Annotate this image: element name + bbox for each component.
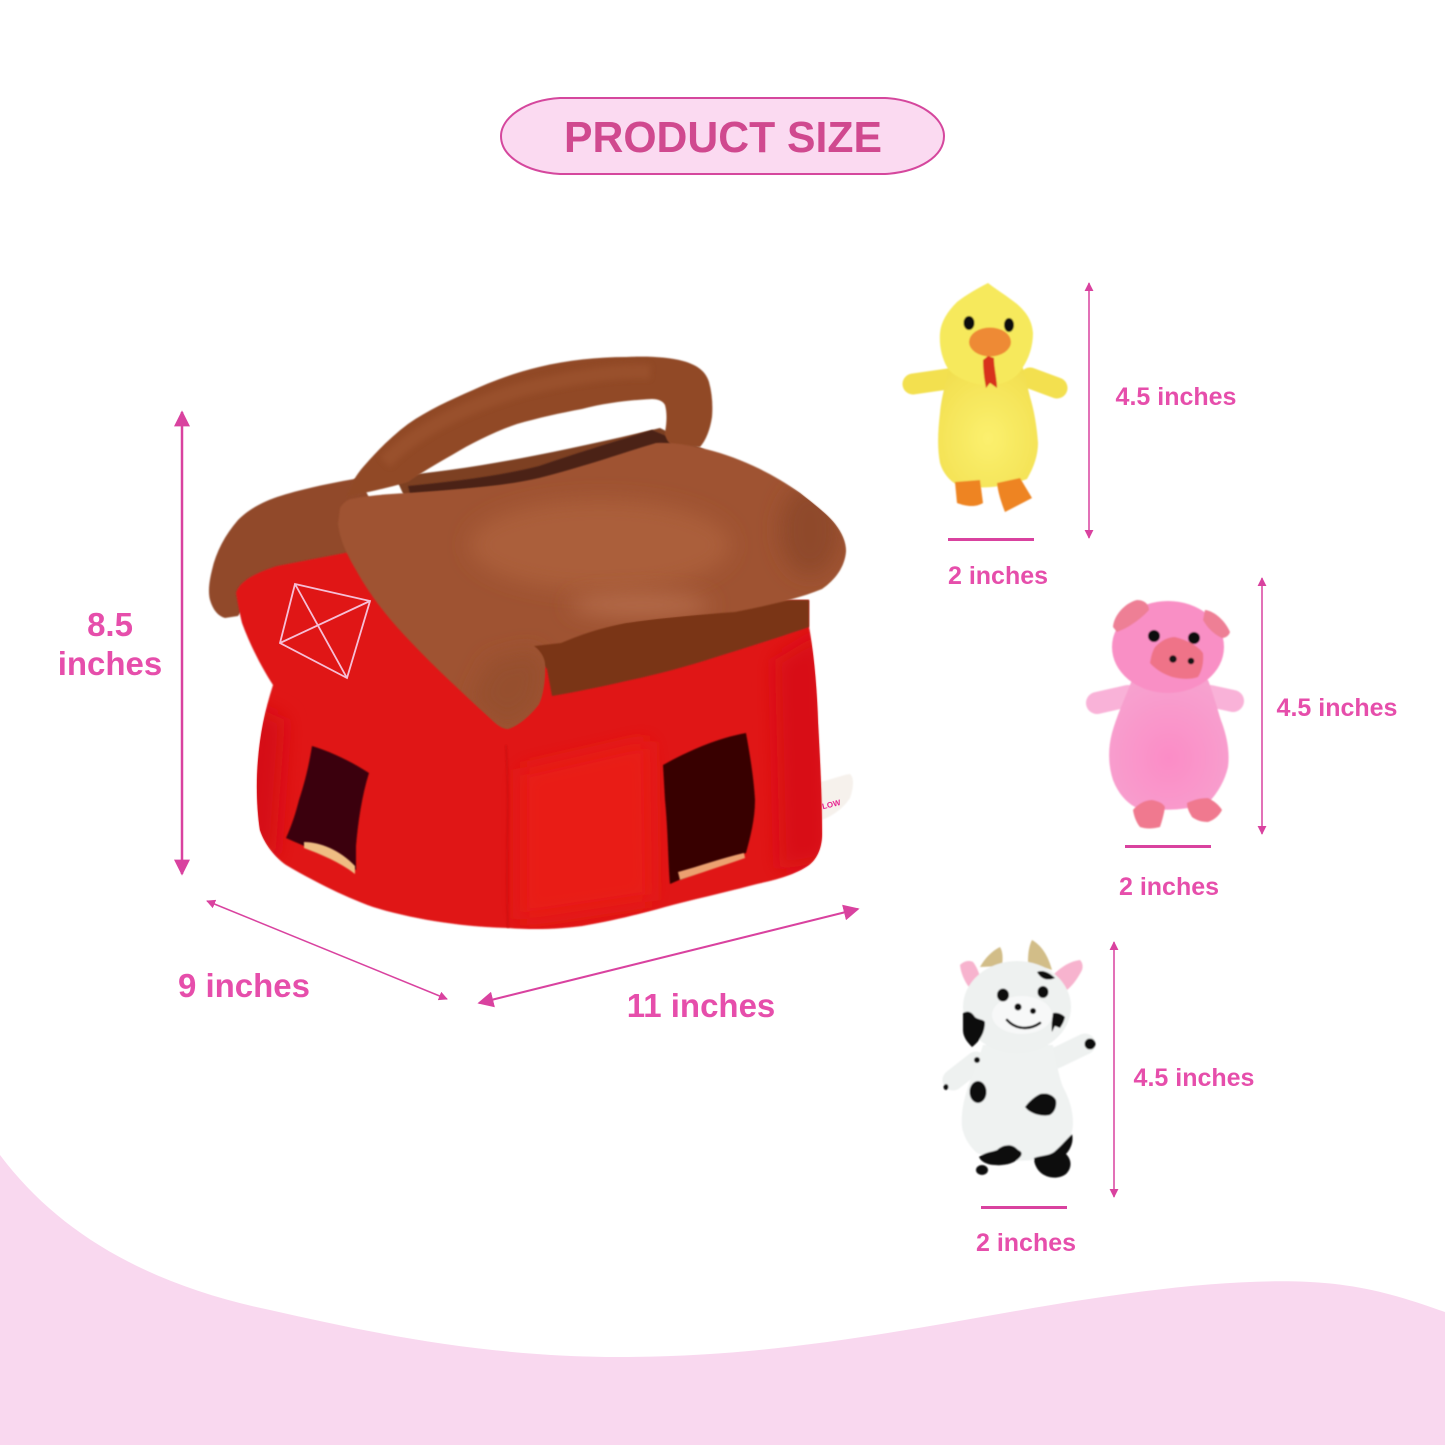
arrow: barn depth bbox=[207, 901, 447, 999]
pig: eyes bbox=[1148, 630, 1200, 644]
background wave bbox=[0, 1155, 1445, 1445]
roof: main blanket bbox=[338, 443, 846, 729]
arrow: barn height bbox=[181, 412, 183, 874]
barn: tag text: LOW bbox=[821, 798, 842, 811]
arrow: barn width bbox=[479, 909, 858, 1003]
chick: eyes bbox=[964, 316, 1014, 332]
label: pig height: 4.5 inches bbox=[1277, 694, 1397, 722]
chick: arms bbox=[913, 378, 1057, 388]
pig: arms bbox=[1097, 696, 1233, 703]
cow: smile bbox=[1007, 1020, 1040, 1028]
label: chick width: 2 inches bbox=[948, 562, 1048, 590]
barn: front seam bbox=[506, 745, 508, 928]
arrow: chick height bbox=[1088, 283, 1090, 538]
cow: ears bbox=[960, 960, 1083, 991]
barn: top dark gap bbox=[408, 430, 690, 494]
cow plush toy bbox=[944, 940, 1096, 1178]
pig width bar bbox=[1125, 845, 1211, 848]
cow: eyes and nostrils bbox=[997, 986, 1048, 1014]
barn: right window bbox=[663, 733, 755, 884]
roof: lighter patches bbox=[478, 504, 722, 585]
barn: top brown band bbox=[395, 428, 705, 498]
chick width bar bbox=[948, 538, 1034, 541]
label: 8.5 inches: inches bbox=[58, 645, 162, 682]
barn: side tag bbox=[820, 774, 853, 820]
barn: dark under roof layer bbox=[520, 600, 809, 696]
roof: handle highlight bbox=[385, 372, 650, 462]
cow: arms bbox=[953, 1044, 1085, 1080]
chick plush toy bbox=[913, 283, 1057, 512]
barn: left window floor bbox=[304, 842, 355, 874]
cow: body bbox=[962, 1045, 1073, 1161]
label: cow height: 4.5 inches bbox=[1134, 1064, 1254, 1092]
label: 11 inches: 11 inches bbox=[627, 987, 775, 1024]
roof: handle bbox=[347, 357, 712, 497]
cow width bar bbox=[981, 1206, 1067, 1209]
label: pig width: 2 inches bbox=[1119, 873, 1219, 901]
barn plush toy bbox=[209, 357, 853, 929]
chick: body bbox=[938, 365, 1038, 487]
chick: beak bbox=[969, 328, 1011, 356]
pig: feet bbox=[1133, 798, 1222, 828]
pig: ears bbox=[1113, 600, 1230, 638]
barn: right wall panel bbox=[775, 630, 830, 870]
cow: muzzle bbox=[992, 996, 1052, 1034]
title pill bbox=[501, 98, 944, 174]
barn: red walls bbox=[236, 550, 830, 929]
roof: right darker edge bbox=[780, 485, 840, 575]
roof: corner fold bbox=[470, 668, 545, 729]
pig: body bbox=[1109, 680, 1229, 810]
arrow: cow height bbox=[1113, 942, 1115, 1197]
cow: horns bbox=[980, 940, 1052, 970]
label: chick height: 4.5 inches bbox=[1116, 383, 1236, 411]
label: cow width: 2 inches bbox=[976, 1229, 1076, 1257]
roof: warm fold bbox=[570, 593, 710, 617]
pig: nostrils bbox=[1169, 655, 1194, 664]
barn: left side shade bbox=[256, 698, 286, 862]
cow: head bbox=[963, 961, 1071, 1053]
arrow: pig height bbox=[1261, 578, 1263, 834]
cow: body spots bbox=[944, 1038, 1096, 1178]
chick: head bbox=[940, 283, 1033, 385]
barn: gable window stitching bbox=[280, 584, 370, 678]
barn: right window floor bbox=[678, 853, 745, 880]
pig: head bbox=[1112, 601, 1224, 693]
barn: left roof flap bbox=[209, 478, 370, 618]
label: 9 inches: 9 inches bbox=[178, 967, 310, 1004]
chick: wattle bbox=[983, 356, 997, 388]
label: 8.5 inches: 8.5 bbox=[87, 606, 133, 643]
barn: left window bbox=[286, 746, 369, 870]
barn: front panel bbox=[520, 740, 652, 920]
cow: spots bbox=[963, 971, 1065, 1047]
title pill: PRODUCT SIZE bbox=[564, 113, 882, 162]
pig plush toy bbox=[1097, 600, 1233, 828]
chick: feet bbox=[955, 478, 1032, 512]
pig: snout bbox=[1150, 637, 1203, 679]
